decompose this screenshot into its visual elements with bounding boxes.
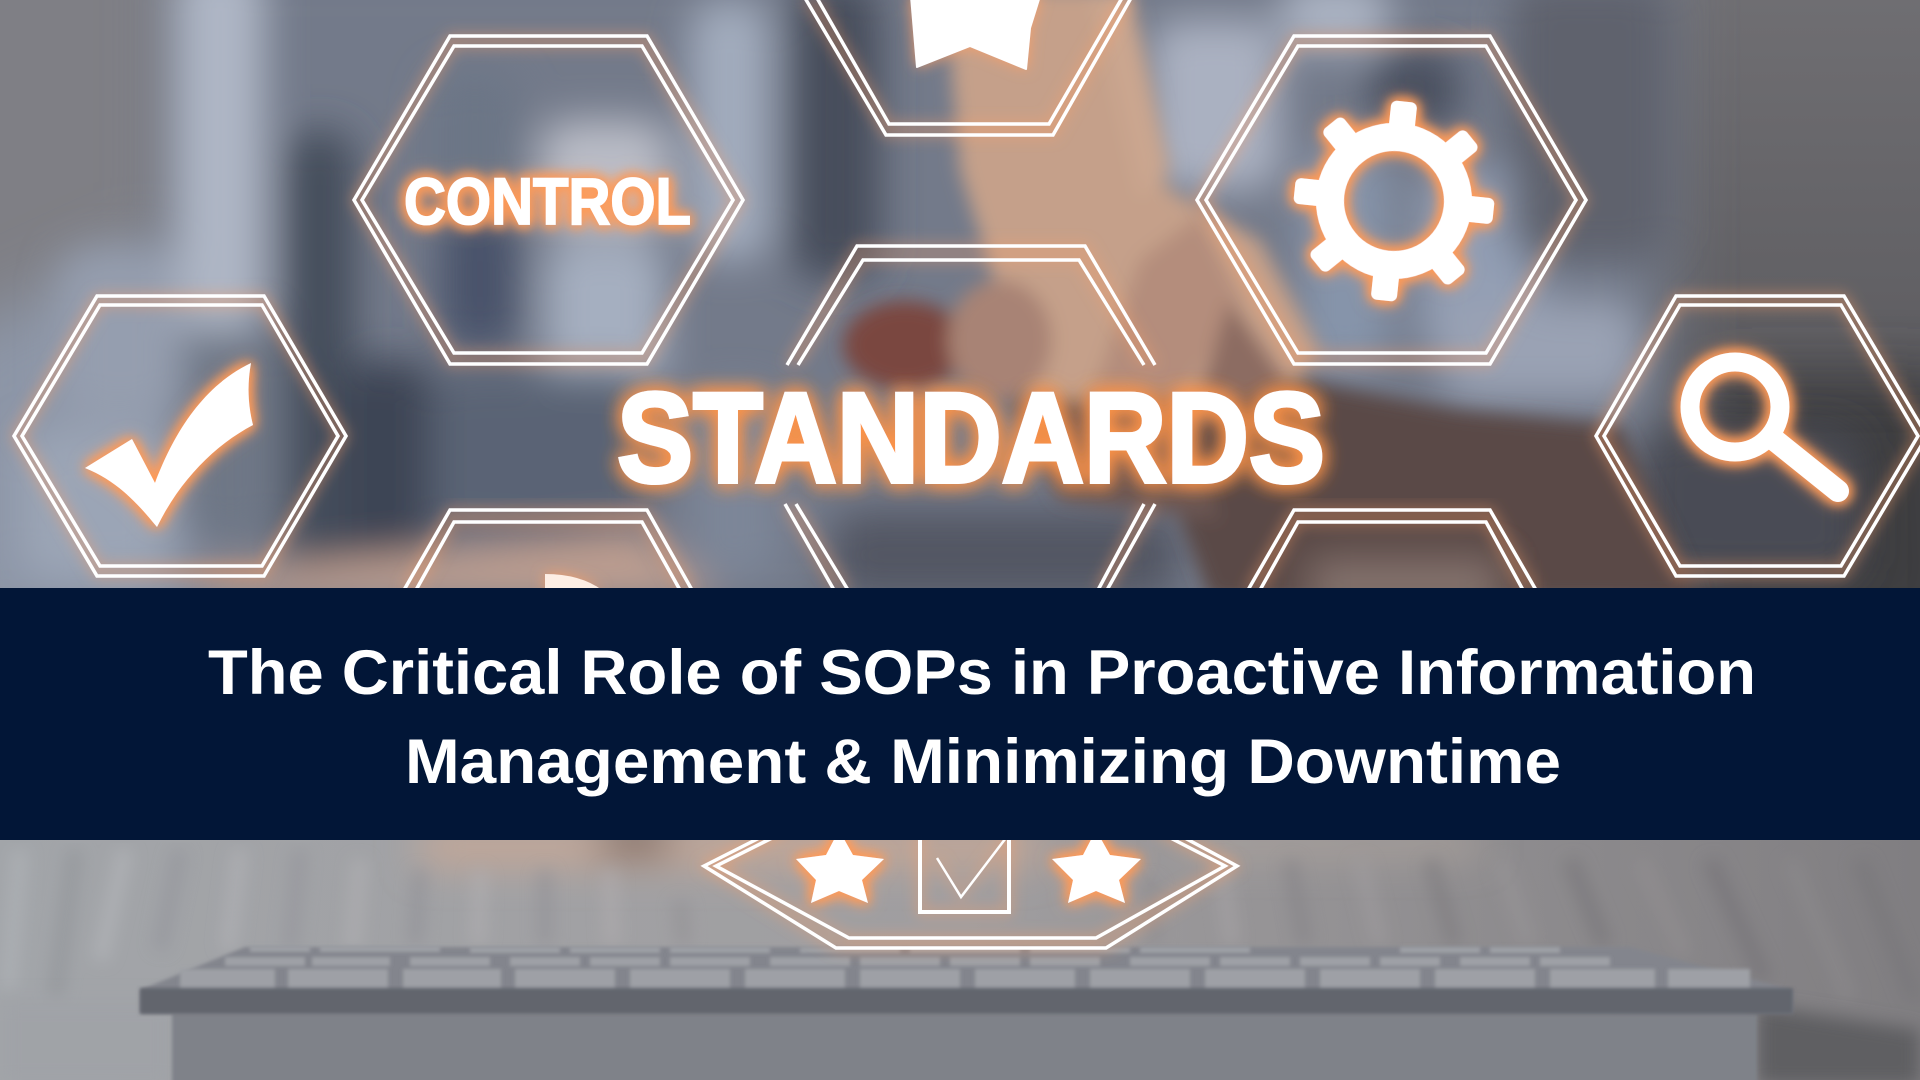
label: control: CONTROL [404, 164, 691, 238]
icon: left star [796, 830, 884, 903]
hexagon: gear [1197, 36, 1586, 364]
title text [208, 638, 1756, 797]
icon: top star [911, 0, 1040, 69]
background: desk streaks [8, 850, 1915, 1000]
icon: partly hidden shape [545, 574, 602, 590]
hexagon: lower left, behind banner [404, 510, 692, 590]
hexagon: standards [785, 246, 1155, 590]
hexagon: check mark [14, 296, 346, 576]
hexagon: bottom rating [704, 830, 1237, 948]
hexagon: lower right, behind banner [1248, 510, 1536, 590]
icon: magnifying glass [1690, 362, 1838, 491]
title text: Management & Minimizing Downtime [405, 727, 1561, 797]
hexagon: top star, cropped by page edge [805, 0, 1131, 135]
title banner [0, 588, 1920, 840]
icon: gear [1284, 91, 1504, 311]
hexagon: magnifier [1596, 296, 1920, 576]
icon: check mark [85, 363, 253, 527]
background: keyboard [0, 946, 1920, 1080]
label: standards: STANDARDS [617, 367, 1325, 510]
hexagon: control [354, 36, 743, 364]
icon: checkbox with tick [920, 830, 1012, 912]
icon: right star [1052, 830, 1141, 903]
title text: The Critical Role of SOPs in Proactive Information [208, 638, 1756, 708]
